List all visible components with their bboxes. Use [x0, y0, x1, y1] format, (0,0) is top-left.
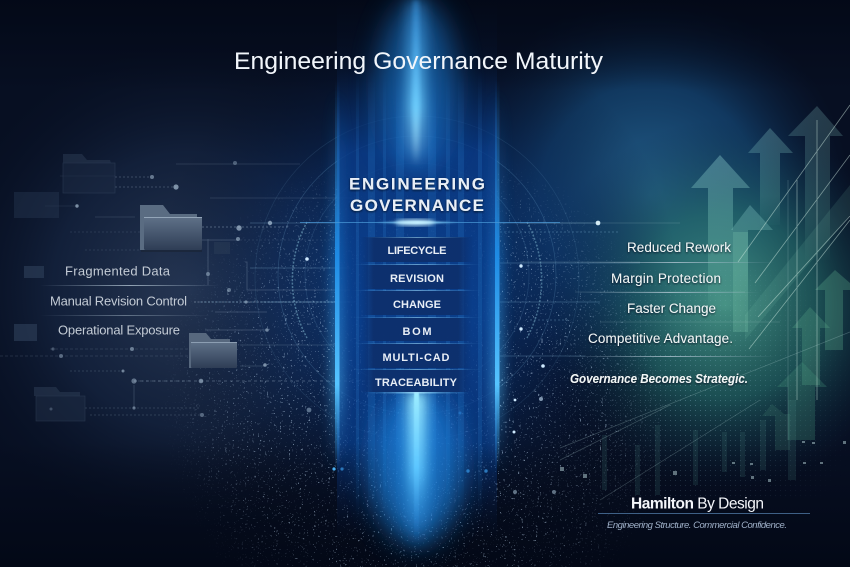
arrow: bottom [777, 362, 827, 440]
right horizontal lines [520, 221, 780, 322]
folder: top left faded [63, 154, 115, 193]
benefit: faster change: Faster Change [627, 301, 716, 316]
central heading [349, 174, 485, 215]
central blue panel [337, 0, 497, 567]
central glow [373, 387, 461, 543]
circular hud rings [255, 116, 579, 440]
row: revision [352, 264, 482, 289]
challenge: manual revision control: Manual Revision Control [50, 294, 187, 308]
row: bom [352, 317, 482, 341]
row: multi-cad [352, 343, 482, 368]
lifecycle stack [352, 237, 482, 394]
challenge: operational exposure: Operational Exposure [58, 322, 180, 338]
central network lines [200, 221, 640, 494]
central top beam [407, 0, 425, 165]
row: lifecycle: LIFECYCLE [388, 245, 446, 257]
central bottom beam [408, 392, 426, 552]
diagonal growth band [745, 185, 850, 340]
row: revision: REVISION [390, 273, 444, 285]
central heading: GOVERNANCE [350, 196, 484, 215]
right benefits list [570, 240, 748, 386]
benefit: reduced rework: Reduced Rework [627, 240, 731, 255]
arrow: large back right [788, 106, 843, 260]
main title: Engineering Governance Maturity [234, 48, 603, 75]
arrow: front large [691, 155, 750, 310]
folder: small square marks [14, 242, 230, 341]
brand name: Hamilton By Design [631, 496, 764, 512]
strategic statement: Governance Becomes Strategic. [570, 372, 748, 386]
arrow: green small [731, 205, 773, 300]
brand tagline: Engineering Structure. Commercial Confidence. [607, 520, 787, 531]
horizontal flare [300, 220, 560, 226]
chart lines lower [560, 180, 850, 500]
benefit: competitive advantage: Competitive Advantage. [588, 331, 733, 346]
chart lines upper [738, 105, 850, 400]
particle field [170, 164, 831, 567]
row: bom: BOM [402, 326, 432, 338]
brand rule [598, 513, 810, 514]
arrows and growth chart [560, 105, 850, 500]
folder: small left faded [14, 192, 59, 218]
row: traceability [352, 369, 482, 394]
arrow: bottom small [762, 404, 790, 450]
left data network lines [0, 161, 420, 417]
arrow: second [748, 128, 793, 225]
row: change [352, 290, 482, 315]
left challenges list [50, 264, 187, 338]
side light bars [332, 80, 502, 470]
bright glow behind arrows [733, 232, 748, 332]
small chart dots [560, 441, 846, 482]
benefit: margin protection: Margin Protection [611, 271, 721, 286]
row: traceability: TRACEABILITY [375, 377, 458, 389]
vertical streaks [356, 70, 482, 520]
brand block [598, 496, 810, 531]
folder: lower [189, 333, 237, 368]
central heading: ENGINEERING [349, 174, 485, 194]
folder: main upper [140, 205, 202, 252]
row: multi-cad: MULTI-CAD [382, 352, 450, 364]
folder: bottom left faded [34, 387, 85, 421]
row: change: CHANGE [393, 299, 441, 311]
challenge: fragmented data: Fragmented Data [65, 264, 171, 278]
arrow: lower middle [792, 307, 830, 385]
arrow: lower right [815, 270, 850, 350]
row: lifecycle [360, 237, 474, 262]
lower bars [602, 400, 796, 495]
